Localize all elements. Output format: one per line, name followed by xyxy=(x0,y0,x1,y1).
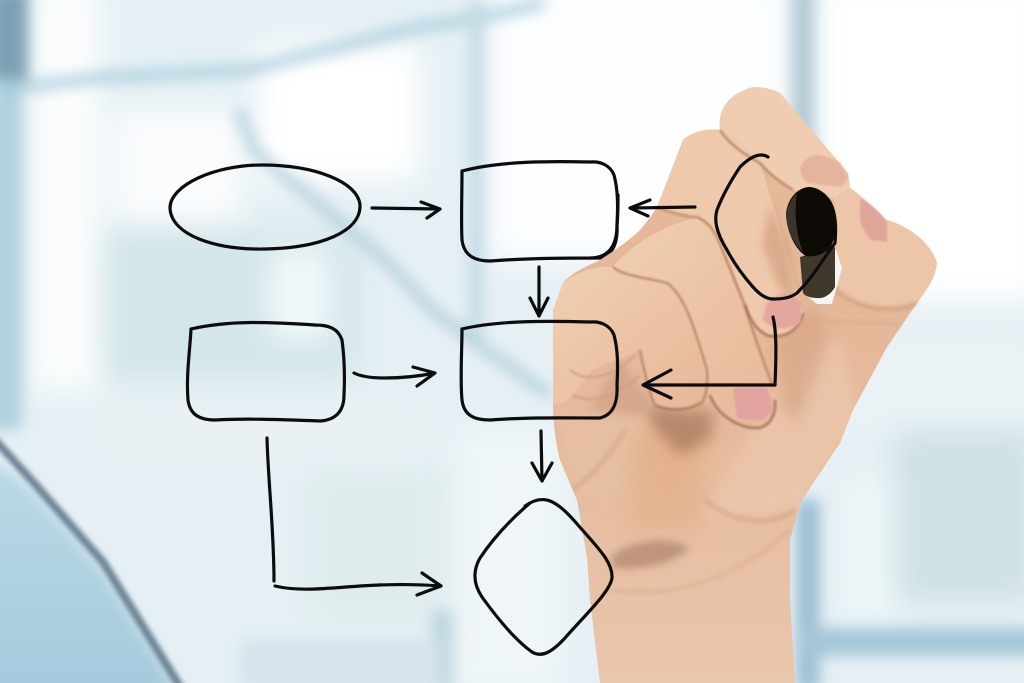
arrow: left box to middle box xyxy=(354,367,435,386)
wrist shadow xyxy=(612,541,690,568)
palm tone patches xyxy=(720,342,854,508)
top diamond on fingers xyxy=(716,155,836,299)
marker cap xyxy=(786,187,835,256)
marker pen xyxy=(786,187,842,304)
middle finger xyxy=(657,129,803,336)
top box right side on hand xyxy=(590,195,618,258)
arrow: oval to top box xyxy=(372,202,440,218)
arrow: left box elbow to diamond xyxy=(267,438,441,595)
left box xyxy=(187,322,344,421)
floor wedge xyxy=(0,450,182,683)
creases xyxy=(613,267,707,405)
diamond node xyxy=(475,500,612,654)
flowchart left and lower strokes xyxy=(170,162,618,595)
palm and wrist xyxy=(553,87,937,683)
ring finger xyxy=(613,217,777,428)
shadow under fingers xyxy=(645,405,715,455)
arrow: top box to middle box xyxy=(530,267,548,316)
middle box xyxy=(461,321,618,420)
thumb xyxy=(833,188,937,308)
top box xyxy=(462,162,618,261)
arrow: middle box to diamond xyxy=(532,431,552,481)
fingernail: ring xyxy=(733,387,773,420)
fingernail: index xyxy=(800,155,848,187)
wrist creases xyxy=(618,590,671,593)
index finger xyxy=(720,87,850,198)
oval node xyxy=(170,165,360,249)
arrow: elbow into middle box xyxy=(643,317,776,398)
arrow: top diamond to top box xyxy=(630,200,695,216)
fingernail: middle xyxy=(762,292,802,328)
flowchart strokes over hand xyxy=(461,155,836,654)
white gap behind marker xyxy=(803,250,842,304)
little finger xyxy=(553,267,707,409)
marker body xyxy=(800,247,835,298)
middle finger shadow toward marker xyxy=(762,205,798,300)
curled finger shading xyxy=(570,355,640,399)
fingernail: thumb xyxy=(860,198,887,242)
hand xyxy=(553,87,937,683)
